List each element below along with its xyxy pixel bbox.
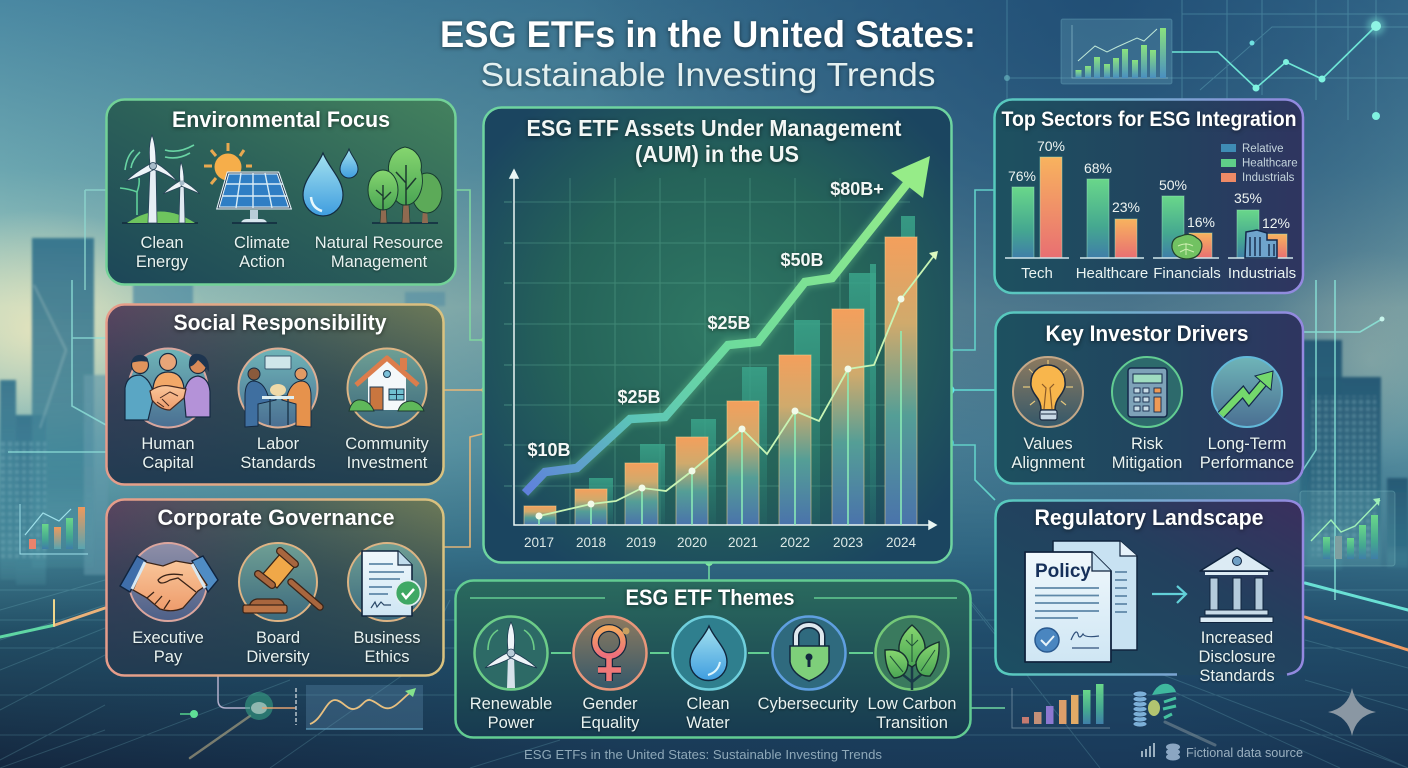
label: increased disclosure standards: Increased (1201, 629, 1273, 647)
label: community investment: Investment (347, 454, 428, 472)
icon: renewable power (474, 616, 548, 690)
bar values (1008, 138, 1290, 231)
label: clean water: Clean (686, 695, 730, 713)
icon: executive pay handshake (120, 543, 218, 621)
label: renewable power: Power (488, 714, 535, 732)
light beams (0, 583, 1408, 758)
perspective ground grid (0, 580, 1408, 768)
label: values alignment: Alignment (1011, 454, 1085, 472)
value labels: $50B (780, 250, 824, 270)
label: long-term performance: Performance (1200, 454, 1294, 472)
year labels: 2018 (576, 535, 606, 550)
icon: industrial building (1245, 230, 1277, 258)
label: clean water: Water (686, 714, 730, 732)
value labels: $80B+ (830, 179, 884, 199)
chart heading line 2: (AUM) in the US (635, 141, 799, 167)
panel: key investor drivers (996, 312, 1303, 484)
icon: calculator (1112, 357, 1182, 427)
value labels: $10B (527, 440, 571, 460)
label: human capital: Capital (142, 454, 194, 472)
connector lines (8, 190, 1384, 708)
panel: ESG ETF themes (456, 580, 970, 738)
label: renewable power: Renewable (470, 695, 552, 713)
value labels: $25B (707, 313, 751, 333)
value labels: $25B (617, 387, 661, 407)
label: climate action: Action (239, 253, 285, 271)
heading: Social Responsibility (174, 310, 387, 335)
top right network line chart (1004, 0, 1408, 120)
label: risk mitigation: Mitigation (1112, 454, 1182, 472)
title (440, 14, 976, 93)
icon: wind turbines (120, 135, 200, 223)
chart heading: ESG ETF Assets Under Management (526, 115, 902, 141)
heading: ESG ETF Themes (626, 585, 794, 610)
label: natural resource management: Natural Resource (315, 234, 443, 252)
panel: corporate governance (106, 500, 444, 676)
year labels (524, 535, 917, 550)
legend: Relative (1242, 143, 1284, 155)
label: board diversity: Board (256, 629, 300, 647)
label: gender equality: Equality (581, 714, 640, 732)
label: low carbon transition: Transition (876, 714, 948, 732)
icon: trees (368, 147, 442, 223)
legend: Healthcare (1242, 158, 1298, 170)
bar values: 35% (1234, 190, 1262, 206)
background bars (589, 216, 915, 525)
sector bars (1012, 157, 1287, 258)
year labels: 2020 (677, 535, 707, 550)
category labels: Tech (1021, 265, 1053, 282)
icon: clean water (672, 616, 746, 690)
icon: human capital (125, 348, 210, 428)
year labels: 2019 (626, 535, 656, 550)
value labels (527, 179, 884, 460)
bottom right mini bar chart (1012, 684, 1110, 728)
bottom left connector node and chart (180, 675, 423, 729)
category labels (1021, 265, 1296, 282)
label: climate action: Climate (234, 234, 290, 252)
subtitle: Sustainable Investing Trends (480, 56, 936, 93)
label: gender equality: Gender (582, 695, 638, 713)
icon: community investment (348, 348, 426, 428)
footer title: ESG ETFs in the United States: Sustainable Investing Trends (524, 748, 882, 762)
top right mini bar chart (1061, 19, 1172, 84)
panel: top sectors (994, 100, 1303, 293)
bar values: 76% (1008, 168, 1036, 184)
category labels: Healthcare (1076, 265, 1148, 282)
icon: sun and solar panel (204, 143, 290, 223)
label: community investment: Community (345, 435, 429, 453)
category labels: Financials (1153, 265, 1221, 282)
icon: policy documents (1025, 541, 1137, 662)
icon: water drops (303, 149, 358, 216)
label: business ethics: Business (354, 629, 420, 647)
icon: policy documents: Policy (1035, 561, 1091, 582)
icon: institution building (1200, 548, 1273, 622)
bar values: 23% (1112, 199, 1140, 215)
watermark star (1328, 688, 1376, 736)
label: increased disclosure standards: Disclosure (1198, 648, 1276, 666)
label: values alignment: Values (1023, 435, 1073, 453)
bar values: 50% (1159, 177, 1187, 193)
heading: Key Investor Drivers (1046, 321, 1248, 346)
label: executive pay: Executive (132, 629, 204, 647)
panel: social responsibility (106, 304, 444, 484)
right background bar chart (1300, 491, 1395, 566)
icon: board diversity gavel (239, 543, 320, 621)
panel: regulatory landscape (996, 500, 1303, 685)
category labels: Industrials (1228, 265, 1296, 282)
label: labor standards: Standards (240, 454, 316, 472)
icon: light bulb (1013, 357, 1083, 427)
icon: long-term performance arrow (1212, 357, 1282, 427)
footer source (1142, 743, 1303, 760)
heading: Regulatory Landscape (1034, 505, 1264, 530)
icon: cybersecurity (772, 616, 846, 690)
label: executive pay: Pay (154, 648, 183, 666)
label: board diversity: Diversity (246, 648, 310, 666)
label: cybersecurity: Cybersecurity (758, 695, 859, 713)
label: natural resource management: Management (331, 253, 428, 271)
legend (1221, 143, 1298, 184)
axes (510, 170, 936, 529)
city skyline right (1300, 340, 1408, 570)
label: increased disclosure standards: Standards (1199, 667, 1275, 685)
year labels: 2022 (780, 535, 810, 550)
label: business ethics: Ethics (365, 648, 409, 666)
icon: coins and globe (1133, 684, 1176, 727)
year labels: 2021 (728, 535, 758, 550)
thin trend line (536, 251, 938, 525)
label: risk mitigation: Risk (1131, 435, 1163, 453)
label: clean energy: Energy (136, 253, 189, 271)
footer source: Fictional data source (1186, 745, 1303, 760)
year labels: 2024 (886, 535, 917, 550)
bar values: 16% (1187, 214, 1215, 230)
heading: Top Sectors for ESG Integration (1002, 107, 1296, 131)
title: ESG ETFs in the United States: (440, 14, 976, 55)
left background bar chart (20, 504, 88, 554)
heading: Corporate Governance (158, 505, 394, 530)
icon: business ethics document (348, 543, 426, 621)
label: human capital: Human (141, 435, 195, 453)
panel: environmental focus (106, 100, 456, 284)
label: long-term performance: Long-Term (1208, 435, 1286, 453)
icon: gender equality (574, 616, 646, 690)
label: clean energy: Clean (140, 234, 184, 252)
year labels: 2023 (833, 535, 863, 550)
year labels: 2017 (524, 535, 554, 550)
legend: Industrials (1242, 172, 1295, 184)
arrow (1152, 586, 1186, 603)
bar values: 70% (1037, 138, 1065, 154)
icon: green financial cluster (1172, 234, 1202, 259)
icon: labor standards (238, 348, 318, 428)
bar values: 68% (1084, 160, 1112, 176)
bar values: 12% (1262, 215, 1290, 231)
icon: low carbon transition (876, 616, 948, 690)
heading: Environmental Focus (172, 107, 390, 132)
growth arrow (525, 156, 930, 493)
city skyline left (0, 238, 445, 585)
bars 2017 to 2024 (524, 237, 917, 525)
label: low carbon transition: Low Carbon (868, 695, 956, 713)
grid (504, 178, 910, 525)
label: labor standards: Labor (257, 435, 299, 453)
panel: AUM chart (484, 108, 952, 562)
